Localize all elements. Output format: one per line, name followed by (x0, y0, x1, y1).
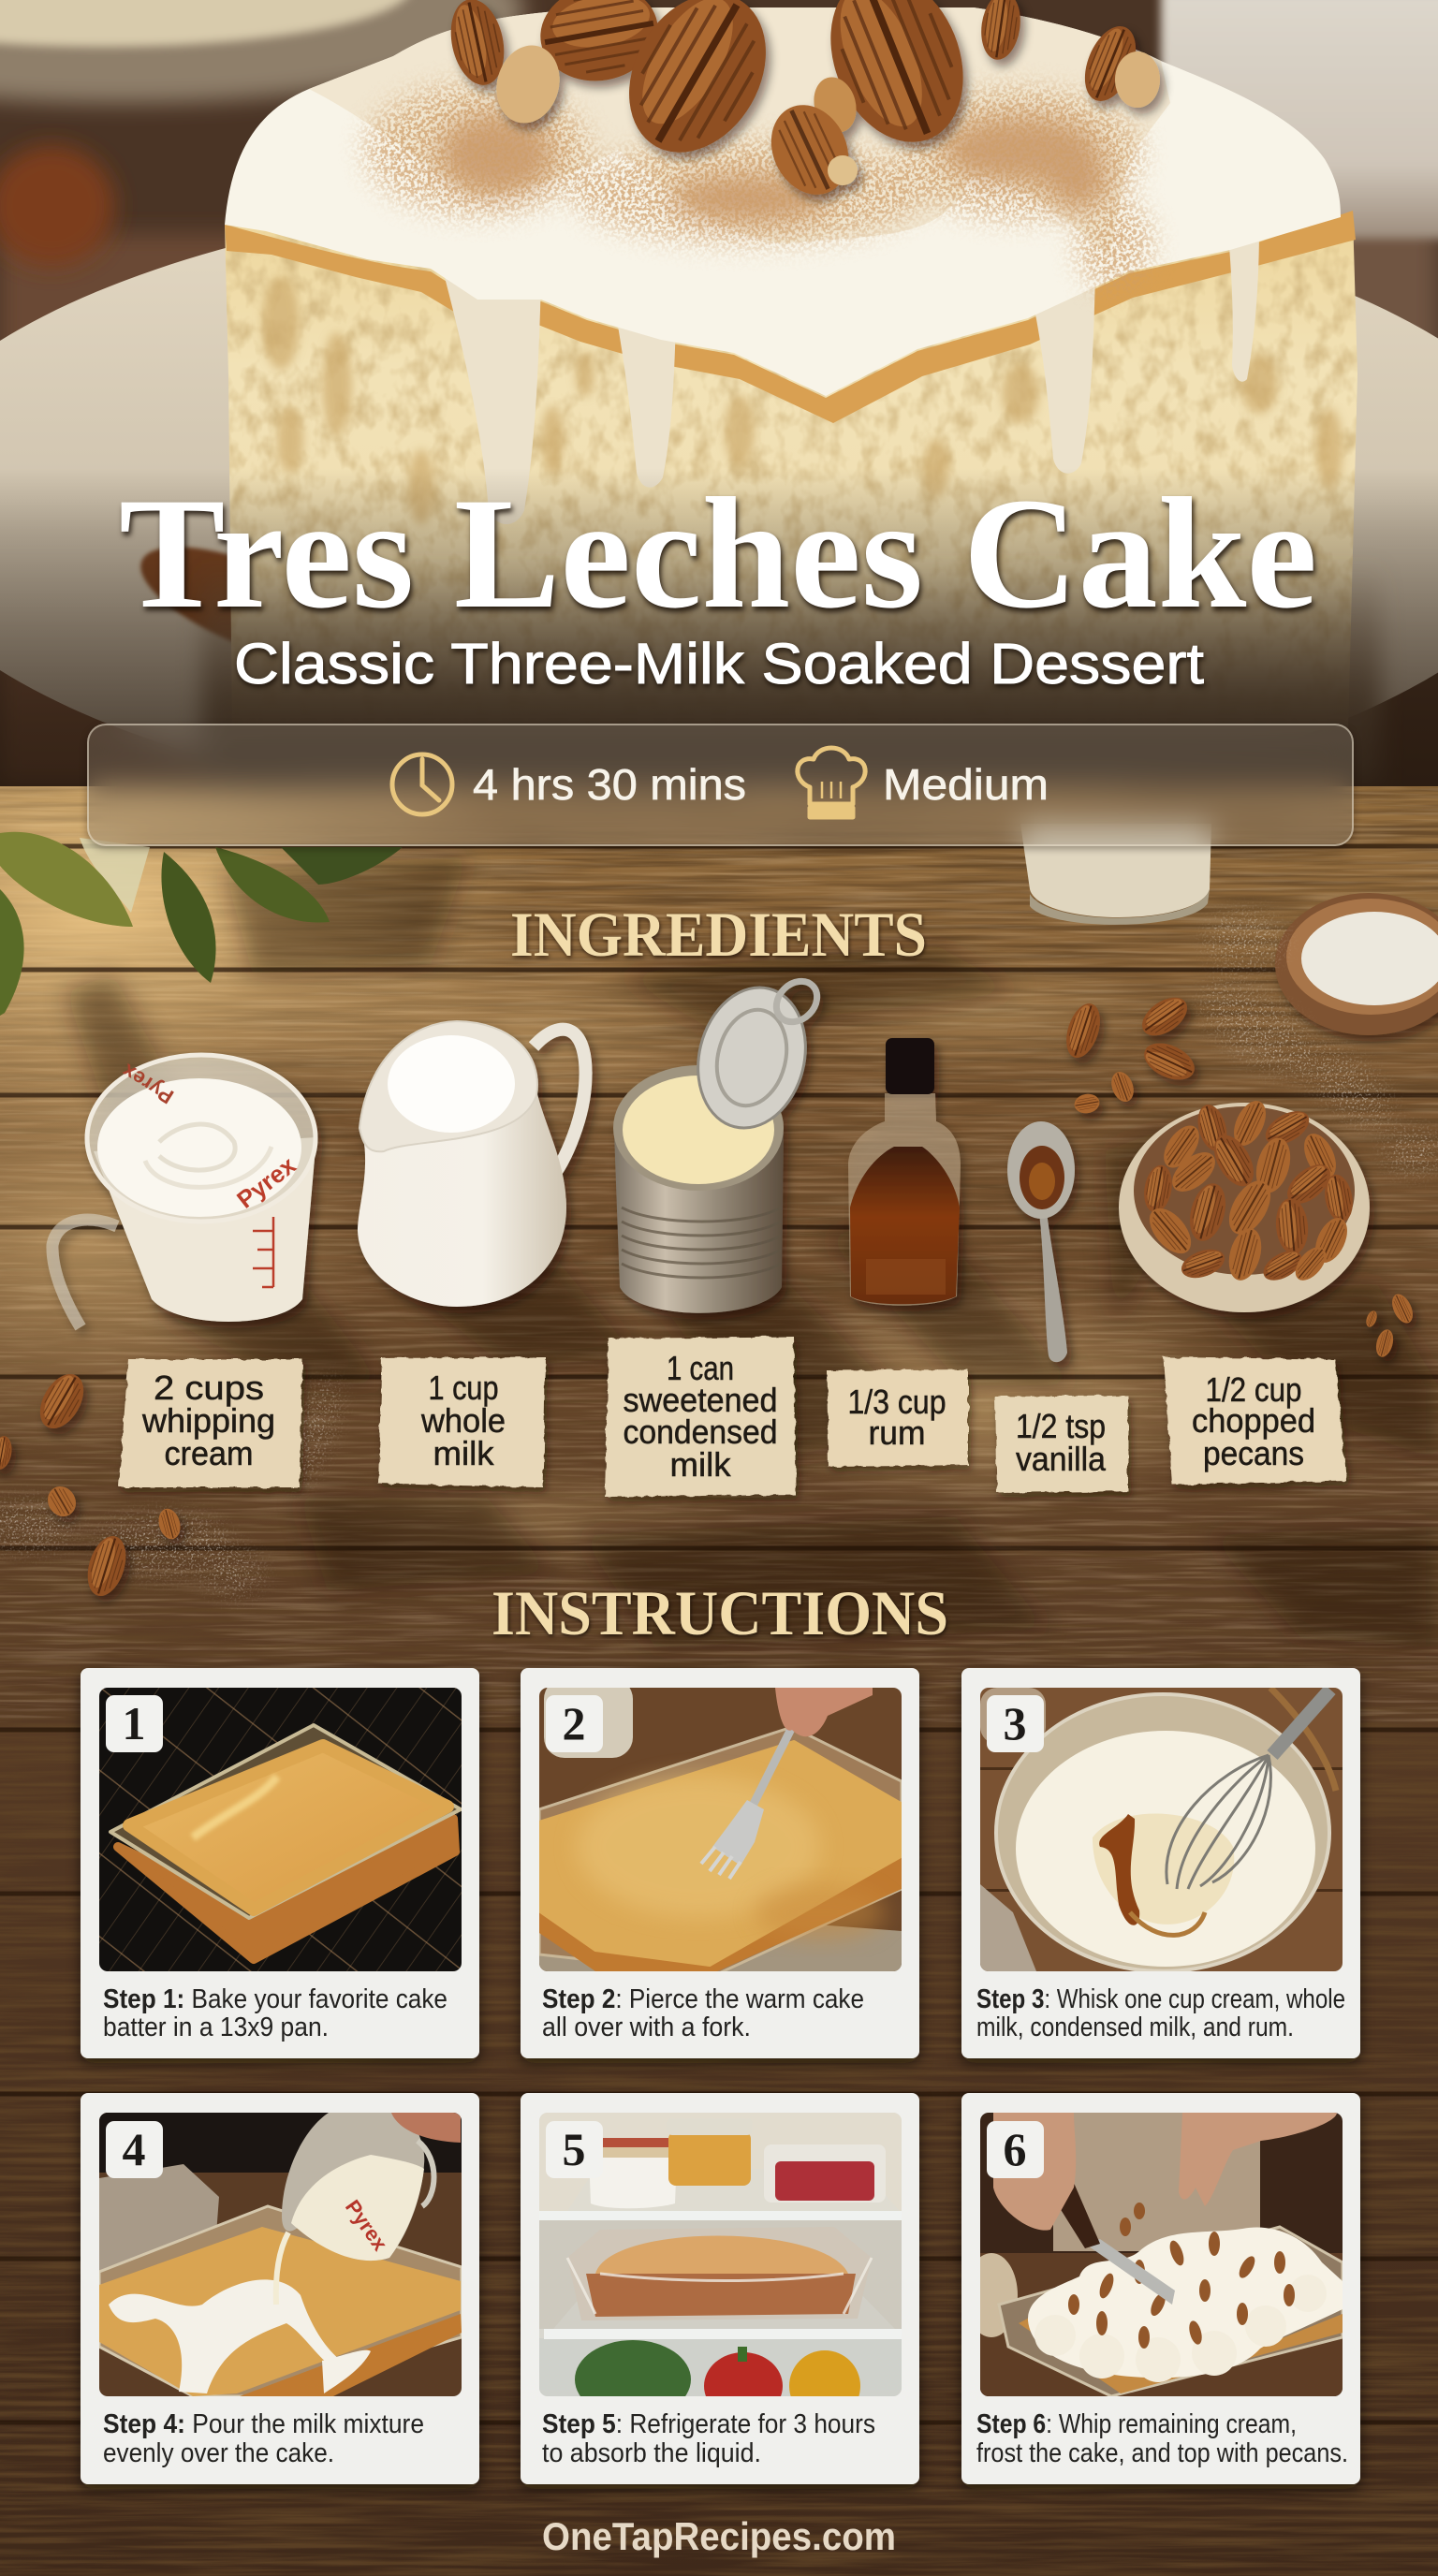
soft fade of the cake into the plate (201, 562, 1381, 786)
ingredient: spoon of vanilla (1007, 1121, 1075, 1362)
milk glass (1020, 824, 1211, 917)
ingredient label: 1/3 cup rum (827, 1369, 968, 1467)
ingredient label: 1/2 tsp vanilla (995, 1396, 1128, 1493)
step 6 text (976, 2409, 1348, 2468)
step 2 text: Step 2: Pierce the warm cake (542, 1984, 864, 2014)
step 5 number badge: 5 (562, 2123, 586, 2175)
hands (993, 2113, 1076, 2231)
ingredient label: 1 can sweetened condensed milk: condensed (624, 1412, 777, 1451)
cook time text: 4 hrs 30 mins (473, 760, 746, 809)
step 3 text: Step 3: Whisk one cup cream, whole (976, 1984, 1345, 2014)
ingredient label: 1 can sweetened condensed milk: milk (670, 1445, 732, 1484)
step 2 card (521, 1668, 919, 2058)
hero darkening gradient (0, 468, 1438, 786)
flour bowl (1275, 893, 1438, 1035)
ingredient: bowl of chopped pecans (1119, 1096, 1370, 1312)
icing and drips (225, 7, 1341, 524)
step 5 text: to absorb the liquid. (542, 2438, 761, 2468)
scattered pecans (0, 989, 1416, 1601)
hero cake photograph (0, 0, 1438, 824)
step 3 number badge: 3 (1004, 1697, 1026, 1749)
footer website: OneTapRecipes.com (542, 2514, 896, 2558)
ingredient label: 1 can sweetened condensed milk: 1 can (667, 1349, 734, 1387)
cake body crumb (225, 225, 1357, 668)
step 2 number badge (546, 1695, 603, 1752)
step 6 text: Step 6: Whip remaining cream, (976, 2409, 1297, 2439)
can lid (683, 976, 820, 1139)
glass measuring cup (282, 2113, 424, 2261)
ingredient label: 1/2 tsp vanilla: vanilla (1016, 1440, 1107, 1478)
hand (775, 1688, 873, 1736)
step 4 card (81, 2093, 479, 2484)
ingredient: measuring cup of whipping cream: Pyrex (117, 1059, 178, 1108)
cast shadows across the table (66, 856, 1438, 1647)
milk spread (109, 2279, 347, 2393)
title: Tres Leches Cake (119, 465, 1317, 641)
ingredient: can of condensed milk (613, 973, 825, 1313)
step 1 photo: cake baking in oven (99, 1688, 462, 1971)
ingredient label: 1 cup whole milk: milk (433, 1434, 495, 1472)
step 4 number badge (106, 2121, 163, 2178)
step 6 photo: frosting and topping with pecans (965, 2113, 1343, 2396)
ingredient label: 1/3 cup rum: rum (869, 1413, 925, 1452)
step 3 card (961, 1668, 1360, 2058)
step 5 card (521, 2093, 919, 2484)
step 5 number badge (546, 2121, 603, 2178)
step 4 photo: pouring milk over the cake (99, 2113, 462, 2396)
ingredient label: 1 can sweetened condensed milk: sweetened (624, 1381, 777, 1419)
ingredient label: 2 cups whipping cream: cream (165, 1434, 253, 1472)
ingredient: measuring cup of whipping cream (52, 1055, 316, 1327)
ingredient label: 1/2 cup chopped pecans (1164, 1357, 1346, 1485)
ingredient label: 1/2 cup chopped pecans: pecans (1203, 1434, 1304, 1472)
plate under the cake (0, 248, 1438, 753)
step 3 text (976, 1984, 1345, 2042)
ingredient label: 1/2 tsp vanilla: 1/2 tsp (1016, 1407, 1106, 1445)
INSTRUCTIONS heading: INSTRUCTIONS (492, 1577, 948, 1648)
plastic wrapped cake (567, 2227, 872, 2320)
green leaves (0, 832, 403, 1016)
ingredient label: 1/3 cup rum: 1/3 cup (848, 1383, 946, 1421)
step 6 card (961, 2093, 1360, 2484)
cinnamon dusting (365, 84, 1152, 290)
fork (701, 1727, 792, 1879)
step 4 number badge: 4 (122, 2123, 146, 2175)
ingredient: white milk pitcher (358, 1021, 586, 1307)
ingredient: measuring cup of whipping cream: Pyrex (231, 1150, 301, 1214)
leaves and jars behind the ingredients (0, 824, 1438, 1593)
step 6 number badge (987, 2121, 1044, 2178)
step 2 number badge: 2 (562, 1697, 586, 1749)
ingredient label: 1/2 cup chopped pecans: 1/2 cup (1206, 1370, 1301, 1409)
step 1 text: Step 1: Bake your favorite cake (103, 1984, 448, 2014)
ingredient label: 2 cups whipping cream (119, 1359, 302, 1487)
ingredient label: 1 cup whole milk (378, 1357, 546, 1487)
pecans on top (444, 0, 1160, 207)
step 3 photo: whisking milks in a glass bowl (980, 1688, 1343, 1971)
step 4 text: evenly over the cake. (103, 2438, 334, 2468)
step 6 number badge: 6 (1004, 2123, 1026, 2175)
ingredient label: 2 cups whipping cream: 2 cups (154, 1368, 264, 1407)
step 4 photo: pouring milk over the cake: Pyrex (341, 2196, 392, 2256)
step 5 text: Step 5: Refrigerate for 3 hours (542, 2409, 875, 2439)
step 5 photo: cake in the refrigerator (539, 2113, 902, 2422)
flour dustings (0, 915, 1438, 1593)
milk drips (438, 225, 1259, 524)
ingredient label: 1 cup whole milk: whole (420, 1401, 506, 1440)
INGREDIENTS heading: INGREDIENTS (510, 899, 927, 970)
ingredient label: 2 cups whipping cream: whipping (141, 1401, 275, 1440)
pecan bits (1068, 2203, 1295, 2349)
step 2 photo: fork piercing cake (539, 1678, 902, 1974)
icon: chef hat (798, 748, 865, 817)
golden crust line (225, 211, 1356, 423)
cake pan (999, 2227, 1343, 2396)
containers (589, 2155, 677, 2208)
ingredient label: 1 cup whole milk: 1 cup (429, 1368, 498, 1407)
step 1 number badge (106, 1695, 163, 1752)
difficulty text: Medium (883, 760, 1049, 809)
whisk (1167, 1690, 1330, 1889)
step 3 text: milk, condensed milk, and rum. (976, 2012, 1294, 2042)
subtitle: Classic Three-Milk Soaked Dessert (234, 632, 1204, 695)
step 2 text: all over with a fork. (542, 2012, 751, 2042)
vegetables (575, 2340, 691, 2419)
step 5 text (542, 2409, 875, 2468)
step 4 text (103, 2409, 424, 2468)
icon: clock (392, 754, 452, 814)
step 6 text: frost the cake, and top with pecans. (976, 2438, 1348, 2468)
frosted info bar (87, 724, 1354, 846)
frosting (1028, 2228, 1343, 2378)
step 1 text (103, 1984, 448, 2042)
ingredient: rum bottle (848, 1038, 961, 1306)
spatula (1085, 2239, 1175, 2305)
step 1 number badge: 1 (122, 1697, 146, 1749)
step 3 number badge (987, 1695, 1044, 1752)
ingredient label: 1/2 cup chopped pecans: chopped (1192, 1401, 1315, 1440)
step 4 text: Step 4: Pour the milk mixture (103, 2409, 424, 2439)
shelves (567, 2169, 900, 2211)
step 1 text: batter in a 13x9 pan. (103, 2012, 329, 2042)
ingredient label: 1 can sweetened condensed milk (605, 1337, 796, 1497)
step 1 card (81, 1668, 479, 2058)
step 2 text (542, 1984, 864, 2042)
